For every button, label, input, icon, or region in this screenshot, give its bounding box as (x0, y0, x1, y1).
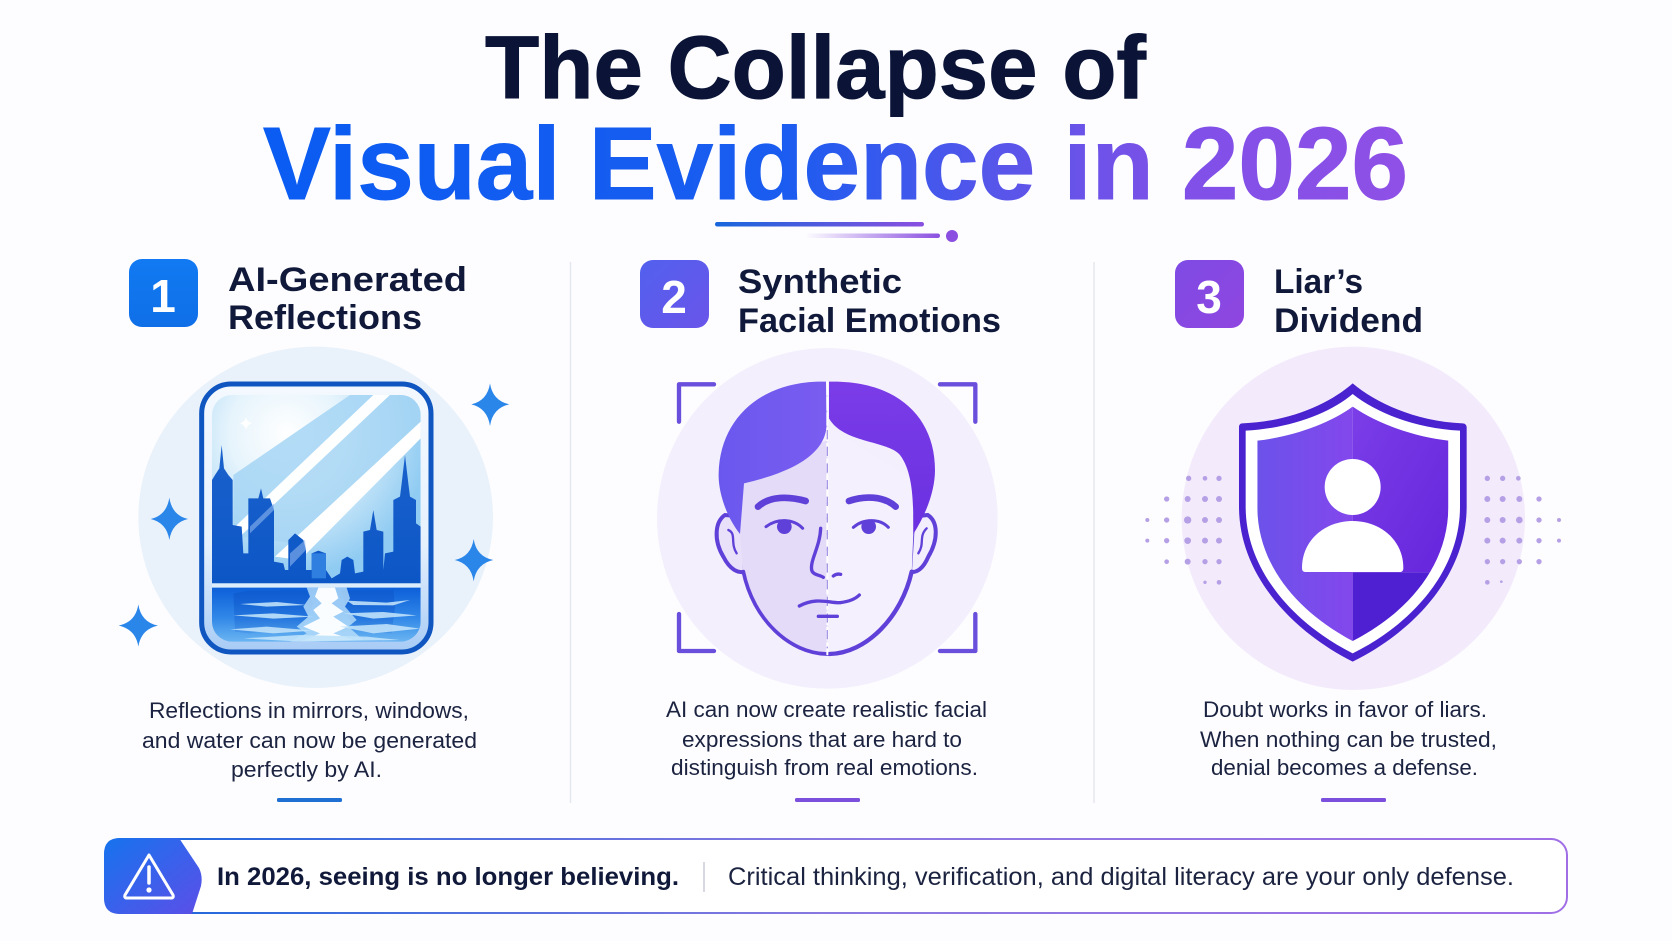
heading 1: AI-Generated (228, 261, 467, 299)
heading 1: Reflections (228, 299, 422, 337)
heading 3: Dividend (1274, 302, 1423, 340)
title line 1: The Collapse of (485, 17, 1146, 117)
icon: sparkles (119, 383, 509, 647)
description 3: denial becomes a defense. (1211, 755, 1478, 780)
number badge 3 (1175, 260, 1244, 328)
number badge 2: 2 (661, 271, 687, 323)
heading 3 (1274, 263, 1423, 340)
hair (719, 382, 827, 534)
description 3: Doubt works in favor of liars. (1203, 697, 1487, 722)
number badge 1: 1 (150, 270, 176, 322)
panel: Synthetic Facial Emotions (640, 260, 1001, 802)
scan brackets (679, 384, 975, 651)
accent bar 3 (1321, 798, 1386, 802)
icon: mirror reflecting a city skyline (119, 347, 509, 688)
description 2: AI can now create realistic facial (666, 697, 987, 722)
description 3 (1200, 697, 1497, 780)
description 3: When nothing can be trusted, (1200, 727, 1497, 752)
number badge 2 (640, 260, 709, 328)
callout bold statement: In 2026, seeing is no longer believing. (217, 863, 679, 891)
panel: AI-Generated Reflections (119, 259, 509, 802)
number badge 1 (129, 259, 198, 327)
description 1: perfectly by AI. (231, 757, 382, 782)
description 2: distinguish from real emotions. (671, 755, 978, 780)
panel: Liar's Dividend (1145, 260, 1561, 802)
callout bar (104, 838, 1567, 914)
heading 2: Facial Emotions (738, 302, 1001, 340)
description 1: Reflections in mirrors, windows, (149, 698, 469, 723)
accent bar 1 (277, 798, 342, 802)
description 1: and water can now be generated (142, 728, 477, 753)
eyes (766, 521, 803, 528)
title line 2: Visual Evidence in 2026 (263, 106, 1408, 221)
eyebrows (758, 498, 806, 507)
face halves (740, 440, 827, 654)
person (1302, 459, 1403, 572)
nose and mouth (799, 528, 859, 616)
description 1 (142, 698, 477, 782)
heading 3: Liar’s (1274, 263, 1363, 301)
ears (717, 515, 745, 572)
heading 1 (228, 261, 467, 337)
number badge 3: 3 (1196, 271, 1222, 323)
dot patterns (1145, 476, 1561, 585)
heading 2 (738, 263, 1001, 340)
title (263, 17, 1408, 221)
center line (824, 382, 830, 655)
icon: warning triangle (104, 838, 202, 914)
description 2: expressions that are hard to (682, 727, 962, 752)
title underline (715, 222, 958, 242)
heading 2: Synthetic (738, 263, 902, 301)
icon: shield with person (1145, 347, 1561, 690)
icon: split synthetic face in a scan frame (657, 348, 998, 689)
accent bar 2 (795, 798, 860, 802)
description 2 (666, 697, 987, 780)
callout supporting text: Critical thinking, verification, and digital literacy are your only defense. (728, 863, 1514, 891)
